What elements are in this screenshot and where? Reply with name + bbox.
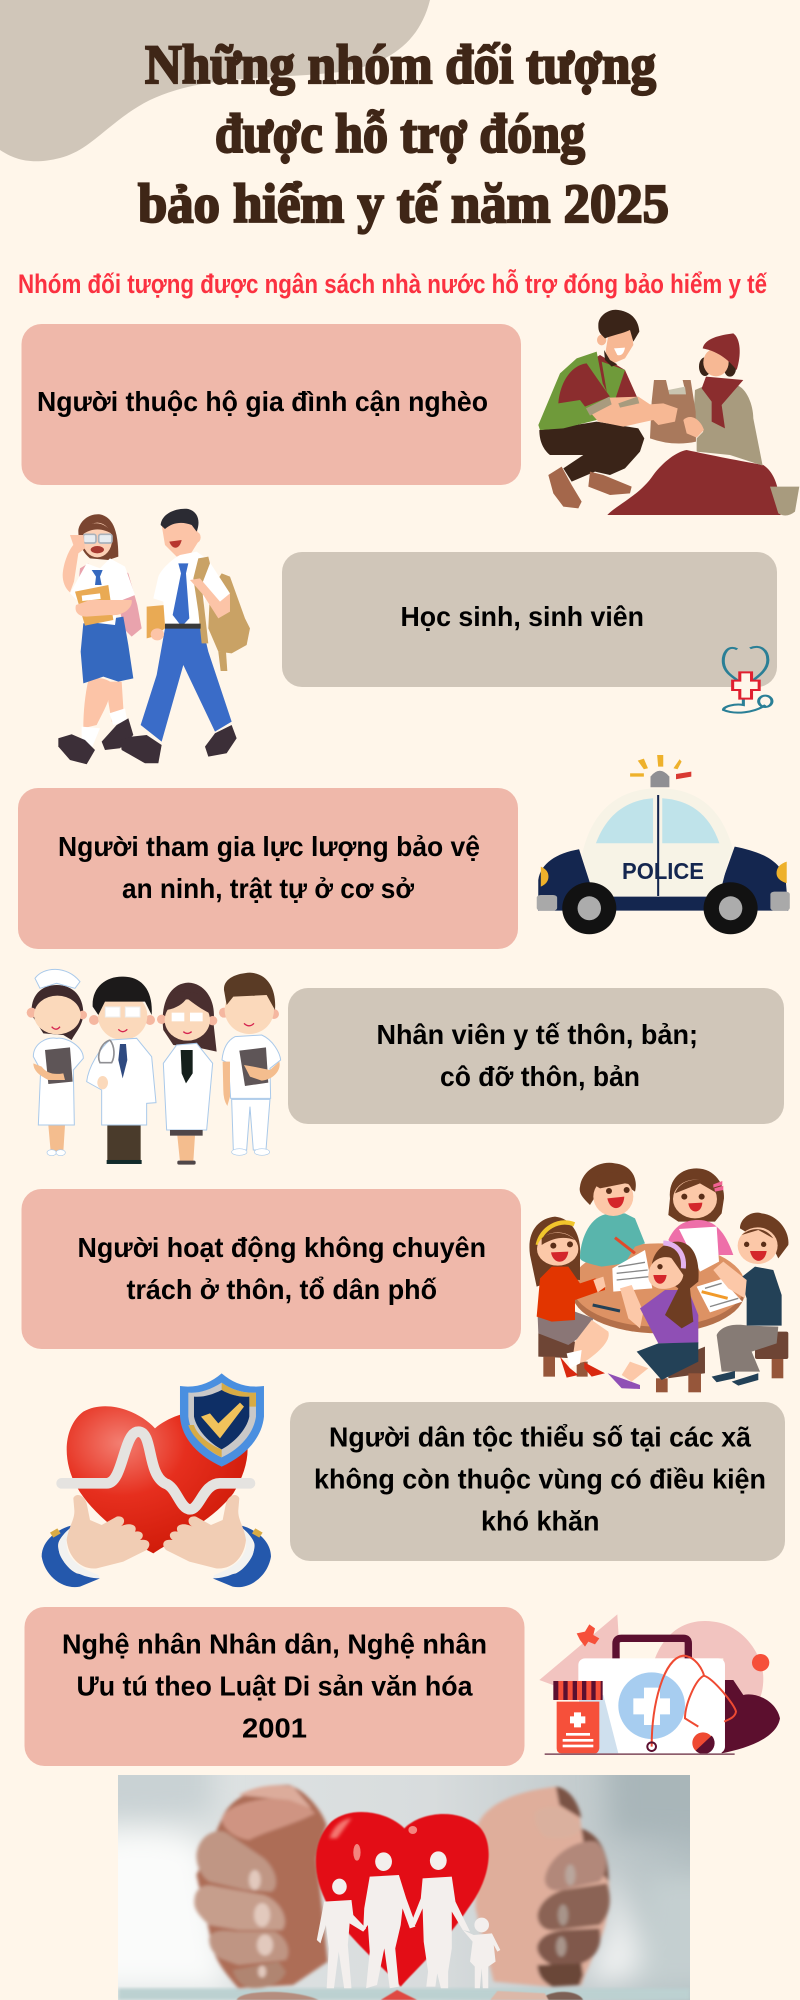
cup <box>770 487 799 515</box>
card: students <box>282 552 777 687</box>
table <box>572 1243 745 1333</box>
illustration: police car <box>537 755 790 934</box>
card text: Người hoạt động không chuyên <box>78 1232 486 1263</box>
child in teal <box>580 1163 645 1267</box>
card text: khó khăn <box>481 1506 600 1536</box>
card text <box>314 1422 766 1536</box>
illustration: medical staff <box>27 969 281 1165</box>
stools <box>538 1332 788 1392</box>
card text <box>58 831 480 904</box>
card text: cô đỡ thôn, bản <box>440 1061 640 1092</box>
shield <box>180 1373 264 1467</box>
card text <box>62 1628 487 1744</box>
photo: hands protecting heart and family <box>118 1775 690 2000</box>
right hand <box>163 1495 271 1587</box>
title: bảo hiểm y tế năm 2025 <box>138 173 669 234</box>
title <box>138 34 669 234</box>
table reflection <box>237 1990 583 2000</box>
boy <box>120 509 250 763</box>
right hand <box>476 1787 610 1987</box>
card text: trách ở thôn, tổ dân phố <box>126 1274 437 1305</box>
card text: không còn thuộc vùng có điều kiện <box>314 1464 766 1494</box>
female doctor <box>157 983 217 1165</box>
blanket <box>607 450 781 515</box>
card text: Nghệ nhân Nhân dân, Nghệ nhân <box>62 1628 487 1660</box>
title: Những nhóm đối tượng <box>145 34 656 95</box>
card text: Người tham gia lực lượng bảo vệ <box>58 831 480 862</box>
illustration: medical kit <box>539 1614 780 1755</box>
pulse line <box>62 1432 250 1509</box>
card text: Người thuộc hộ gia đình cận nghèo <box>37 386 488 417</box>
illustration: children at table <box>529 1163 788 1392</box>
card text: Nhân viên y tế thôn, bản; <box>376 1019 698 1050</box>
card: non-specialised workers <box>22 1189 521 1349</box>
woman <box>693 333 763 466</box>
doctor <box>87 977 156 1164</box>
card text: Ưu tú theo Luật Di sản văn hóa <box>76 1670 473 1702</box>
police label: POLICE <box>622 858 704 884</box>
shirt background <box>118 1775 690 1988</box>
heart <box>316 1812 489 1987</box>
title: được hỗ trợ đóng <box>215 103 585 164</box>
child in navy <box>712 1213 788 1386</box>
card text: Người dân tộc thiểu số tại các xã <box>329 1422 751 1452</box>
card: security forces <box>18 788 518 949</box>
illustration: volunteer giving bag to poor woman <box>538 310 799 515</box>
illustration: students <box>58 509 250 764</box>
medicine bottle <box>553 1681 603 1753</box>
girl <box>58 514 142 764</box>
card text: Học sinh, sinh viên <box>400 601 644 632</box>
icon: stethoscope with cross <box>723 647 772 713</box>
bag <box>650 380 696 444</box>
left hand <box>42 1495 149 1587</box>
man <box>538 310 678 508</box>
card text: 2001 <box>242 1712 307 1744</box>
card: artisans <box>24 1607 524 1766</box>
technician <box>219 973 281 1155</box>
card text: an ninh, trật tự ở cơ sở <box>122 873 414 904</box>
family silhouette <box>317 1851 500 1988</box>
papers <box>593 1250 742 1312</box>
decorative blob <box>0 0 430 161</box>
card: near-poor households <box>22 324 521 485</box>
card: village health workers <box>288 988 784 1124</box>
card: ethnic minority <box>290 1402 785 1561</box>
child in red <box>529 1217 609 1378</box>
illustration: heart with shield and hands <box>42 1373 271 1587</box>
child in pink <box>668 1168 733 1272</box>
card text <box>376 1019 698 1092</box>
stethoscope <box>647 1656 736 1751</box>
nurse <box>27 969 87 1156</box>
card text <box>78 1232 486 1305</box>
left hand <box>194 1785 328 1988</box>
child in purple <box>608 1242 699 1389</box>
